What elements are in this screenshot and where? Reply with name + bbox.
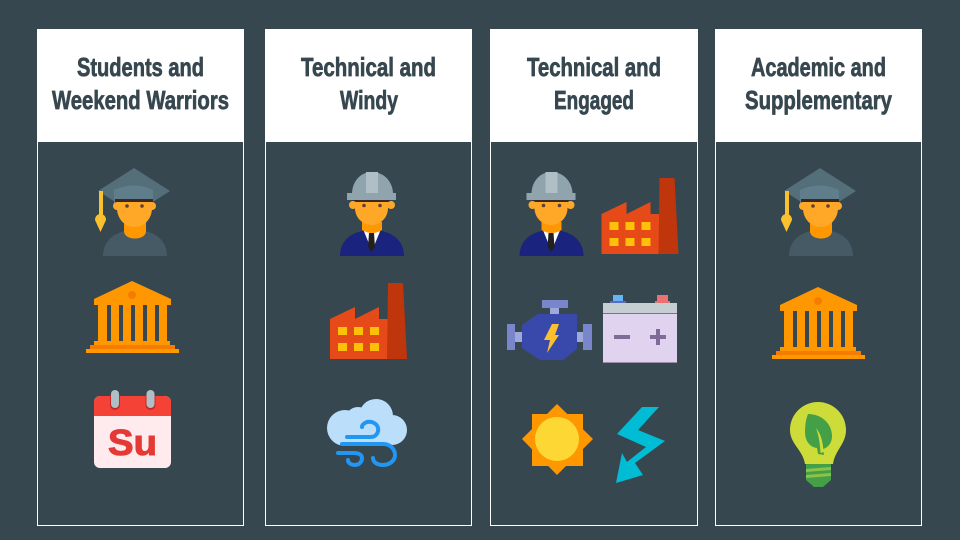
- icon: graduate: [781, 168, 856, 256]
- icon: engine: [507, 300, 592, 360]
- heading panel: windy: Technical and: [301, 52, 436, 82]
- icon: factory: [602, 178, 678, 254]
- icon: calendar Sunday: Su: [108, 422, 157, 463]
- icon: graduate: [95, 168, 170, 256]
- heading panel: supplementary: Supplementary: [745, 85, 892, 115]
- heading panel: students: Students and: [77, 52, 204, 82]
- icon: factory: [330, 283, 407, 359]
- icon: university building: [772, 287, 865, 359]
- icon: engineer: [340, 172, 404, 256]
- panel: Students and Weekend Warriors: [37, 29, 244, 526]
- icon: calendar Sunday: [94, 390, 171, 468]
- heading panel: windy: Windy: [340, 85, 398, 115]
- icon: battery: [603, 295, 677, 363]
- panel: Technical and Engaged: [490, 29, 698, 526]
- heading panel: supplementary: [715, 29, 922, 142]
- panel: Academic and Supplementary: [715, 29, 922, 526]
- heading panel: windy: [265, 29, 472, 142]
- icon: lightning arrow: [616, 407, 665, 483]
- heading panel: engaged: [490, 29, 698, 142]
- heading panel: engaged: Engaged: [554, 85, 634, 115]
- icon: engineer: [520, 172, 584, 256]
- panel: Technical and Windy: [265, 29, 472, 526]
- icon: university building: [86, 281, 179, 353]
- icon: windy cloud: [327, 399, 407, 465]
- heading panel: engaged: Technical and: [527, 52, 661, 82]
- icon: eco light bulb: [790, 402, 846, 487]
- heading panel: students: [37, 29, 244, 142]
- heading panel: students: Weekend Warriors: [52, 85, 229, 115]
- icon: sun: [522, 404, 593, 475]
- heading panel: supplementary: Academic and: [751, 52, 886, 82]
